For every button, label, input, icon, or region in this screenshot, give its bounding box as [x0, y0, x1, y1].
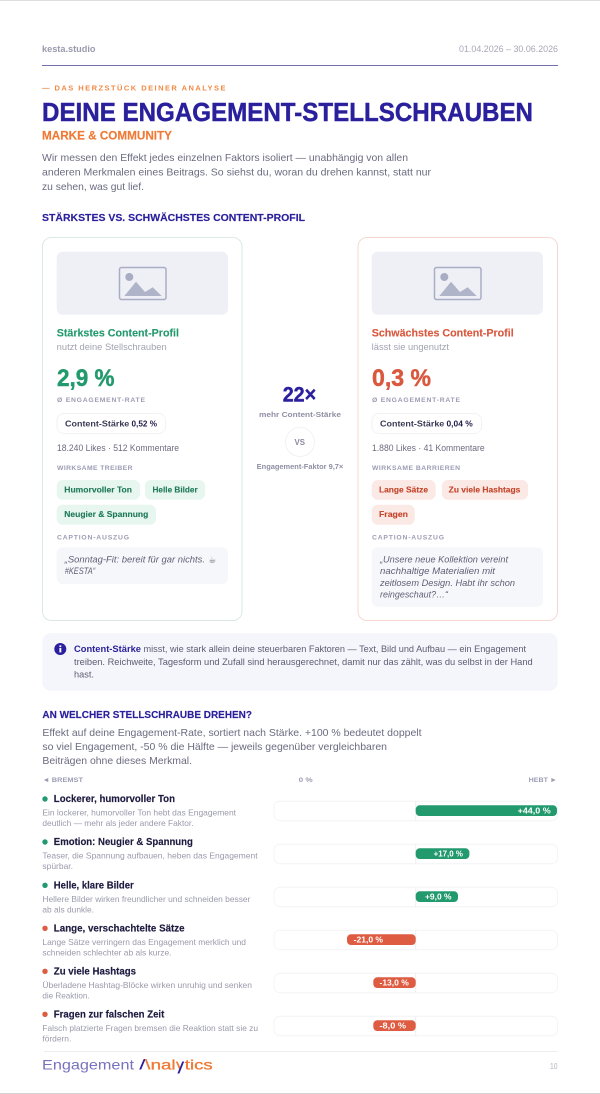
callout: content strength explanation: misst, wie stark allein deine steuerbaren Faktoren — Text, Bild und Aufbau — ein Engagement	[144, 644, 526, 654]
drivers	[57, 465, 205, 525]
drivers: Humorvoller Ton	[64, 484, 132, 494]
callout: content strength explanation: Content-Stärke	[74, 644, 141, 654]
barriers: Zu viele Hashtags	[449, 484, 521, 494]
lever row: long sentences: schneiden schlechter ab als kurze.	[42, 948, 172, 958]
barriers: WIRKSAME BARRIEREN	[372, 465, 460, 472]
lever row: long sentences: Lange, verschachtelte Sätze	[54, 923, 185, 934]
callout: content strength explanation: treiben. Reichweite, Tagesform und Zufall sind herausgerechnet, damit nur das zählt, was du selbst in der Hand	[74, 657, 533, 667]
chart axis labels: ◄ BREMST	[42, 777, 84, 784]
lever row: curiosity: spürbar.	[42, 862, 73, 871]
callout: content strength explanation: hast.	[74, 669, 94, 679]
icon: info	[54, 643, 66, 655]
lever row: long sentences: Lange Sätze verringern das Engagement merklich und	[42, 938, 246, 947]
content strength pill: Content-Stärke	[65, 419, 130, 429]
profile heading: Schwächstes Content-Profil	[372, 327, 514, 339]
chart axis labels: HEBT ►	[529, 777, 557, 784]
lever row: humor	[42, 794, 558, 828]
bar: +44,0 %: +44,0 %	[518, 806, 551, 816]
levers intro text: Beiträgen ohne dieses Merkmal.	[42, 756, 192, 767]
profile heading: Stärkstes Content-Profil	[57, 327, 179, 339]
caption excerpt: #KESTA“	[65, 566, 96, 576]
lever row: bright images: Hellere Bilder wirken freundlicher und schneiden besser	[42, 895, 251, 904]
chart axis labels	[42, 777, 557, 784]
lever row: hashtags	[42, 966, 558, 1000]
image placeholder	[372, 252, 543, 315]
profile heading: nutzt deine Stellschrauben	[57, 342, 167, 352]
drivers: WIRKSAME TREIBER	[57, 465, 133, 472]
engagement rate: Ø ENGAGEMENT-RATE	[57, 397, 145, 404]
lever row: questions: Falsch platzierte Fragen bremsen die Reaktion statt sie zu	[42, 1024, 258, 1033]
lever row: bright images	[42, 880, 558, 914]
callout: content strength explanation	[42, 633, 557, 691]
footer logo: Engagement	[42, 1056, 134, 1072]
caption excerpt: CAPTION-AUSZUG	[57, 534, 129, 542]
header: brand and date range: kesta.studio	[42, 44, 96, 54]
bar: -13,0 %	[274, 973, 558, 993]
barriers: Fragen	[379, 509, 408, 519]
bar: -8,0 %	[274, 1016, 558, 1036]
footer logo	[42, 1056, 213, 1074]
header: brand and date range	[42, 44, 558, 66]
drivers: Neugier & Spannung	[64, 509, 148, 519]
caption excerpt: „Sonntag-Fit: bereit für gar nichts.	[64, 554, 205, 564]
title block: — DAS HERZSTÜCK DEINER ANALYSE	[42, 84, 226, 92]
profile heading	[57, 327, 179, 352]
lever row: questions: fördern.	[42, 1034, 71, 1044]
footer logo: tics	[185, 1056, 213, 1072]
VS badge: VS	[294, 438, 306, 447]
bar: +44,0 %	[274, 801, 558, 821]
reactions: 18.240 Likes · 512 Kommentare	[57, 443, 179, 453]
comparison center column: 22×	[283, 384, 316, 407]
image placeholder	[57, 252, 228, 315]
levers intro text: so viel Engagement, -50 % die Hälfte — jeweils gegenüber vergleichbaren	[42, 742, 387, 753]
lever row: hashtags: Überladene Hashtag-Blöcke wirken unruhig und senken	[42, 980, 252, 990]
bar: -8,0 %: -8,0 %	[380, 1021, 407, 1031]
intro text: Wir messen den Effekt jedes einzelnen Faktors isoliert — unabhängig von allen	[42, 153, 408, 164]
content strength pill: 0,52 %	[132, 419, 158, 429]
profile heading	[372, 327, 514, 352]
bar: +17,0 %: +17,0 %	[434, 849, 463, 859]
lever row: questions: Fragen zur falschen Zeit	[54, 1009, 165, 1020]
panel: weakest content profile	[358, 238, 558, 620]
title block: DEINE ENGAGEMENT-STELLSCHRAUBEN	[42, 99, 533, 127]
content strength pill	[57, 414, 166, 434]
caption excerpt: reingeschaut?…“	[380, 590, 449, 600]
levers intro text: Effekt auf deine Engagement-Rate, sortiert nach Stärke. +100 % bedeutet doppelt	[42, 728, 422, 739]
bar: +9,0 %: +9,0 %	[425, 892, 452, 902]
caption excerpt: zeitlosem Design. Habt ihr schon	[379, 578, 515, 588]
chart axis labels: 0 %	[299, 777, 313, 784]
lever row: curiosity	[42, 837, 558, 871]
intro text	[42, 153, 432, 193]
lever row: humor: Ein lockerer, humorvoller Ton hebt das Engagement	[42, 808, 237, 818]
profile heading: lässt sie ungenutzt	[372, 342, 450, 352]
levers intro text	[42, 728, 422, 767]
lever row: long sentences	[42, 923, 558, 958]
bar: -21,0 %: -21,0 %	[354, 935, 384, 945]
intro text: anderen Merkmalen eines Beitrags. So siehst du, woran du drehen kannst, statt nur	[42, 168, 432, 178]
caption excerpt: ☕	[208, 555, 216, 565]
lever row: curiosity: Emotion: Neugier & Spannung	[54, 837, 193, 848]
bar: +9,0 %	[274, 887, 558, 907]
reactions: 1.880 Likes · 41 Kommentare	[372, 443, 485, 453]
content strength pill: 0,04 %	[446, 419, 473, 429]
comparison center column: mehr Content-Stärke	[259, 410, 341, 419]
comparison center column	[257, 384, 343, 471]
lever row: curiosity: Teaser, die Spannung aufbauen, heben das Engagement	[42, 852, 258, 860]
header: brand and date range: 01.04.2026 – 30.06.2026	[459, 44, 558, 54]
barriers: Lange Sätze	[379, 484, 428, 494]
caption excerpt: nachhaltige Materialien mit	[380, 566, 496, 576]
lever row: bright images: ab als dunkle.	[42, 906, 94, 914]
lever row: hashtags: die Reaktion.	[42, 992, 90, 1000]
engagement rate	[372, 365, 460, 404]
bar: +17,0 %	[274, 844, 558, 864]
lever row: humor: deutlich — mehr als jeder andere Faktor.	[42, 819, 194, 828]
caption excerpt: „Unsere neue Kollektion vereint	[379, 554, 509, 564]
caption excerpt: CAPTION-AUSZUG	[372, 534, 444, 542]
lever row: questions	[42, 1009, 558, 1044]
panel: strongest content profile	[42, 238, 242, 620]
barriers	[372, 465, 528, 525]
engagement rate: 2,9 %	[57, 365, 114, 392]
lever row: hashtags: Zu viele Hashtags	[54, 966, 137, 977]
engagement rate: 0,3 %	[372, 365, 431, 392]
lever row: humor: Lockerer, humorvoller Ton	[54, 794, 175, 805]
caption excerpt	[372, 534, 543, 607]
comparison center column: Engagement-Faktor 9,7×	[257, 462, 343, 471]
bar: -21,0 %	[274, 930, 558, 950]
page number: 10	[550, 1061, 558, 1071]
title block: MARKE & COMMUNITY	[42, 130, 172, 142]
bar: -13,0 %: -13,0 %	[380, 978, 409, 988]
content strength pill	[372, 414, 482, 434]
footer logo: nal	[151, 1056, 176, 1072]
section heading: profile comparison: STÄRKSTES VS. SCHWÄCHSTES CONTENT-PROFIL	[42, 211, 305, 224]
drivers: Helle Bilder	[152, 484, 198, 494]
content strength pill: Content-Stärke	[380, 419, 445, 429]
intro text: zu sehen, was gut lief.	[42, 182, 144, 193]
caption excerpt	[57, 534, 228, 584]
title block	[42, 84, 533, 142]
engagement rate: Ø ENGAGEMENT-RATE	[372, 397, 460, 404]
engagement rate	[57, 365, 145, 404]
section heading: levers: AN WELCHER STELLSCHRAUBE DREHEN?	[42, 710, 252, 721]
lever row: bright images: Helle, klare Bilder	[54, 880, 134, 891]
